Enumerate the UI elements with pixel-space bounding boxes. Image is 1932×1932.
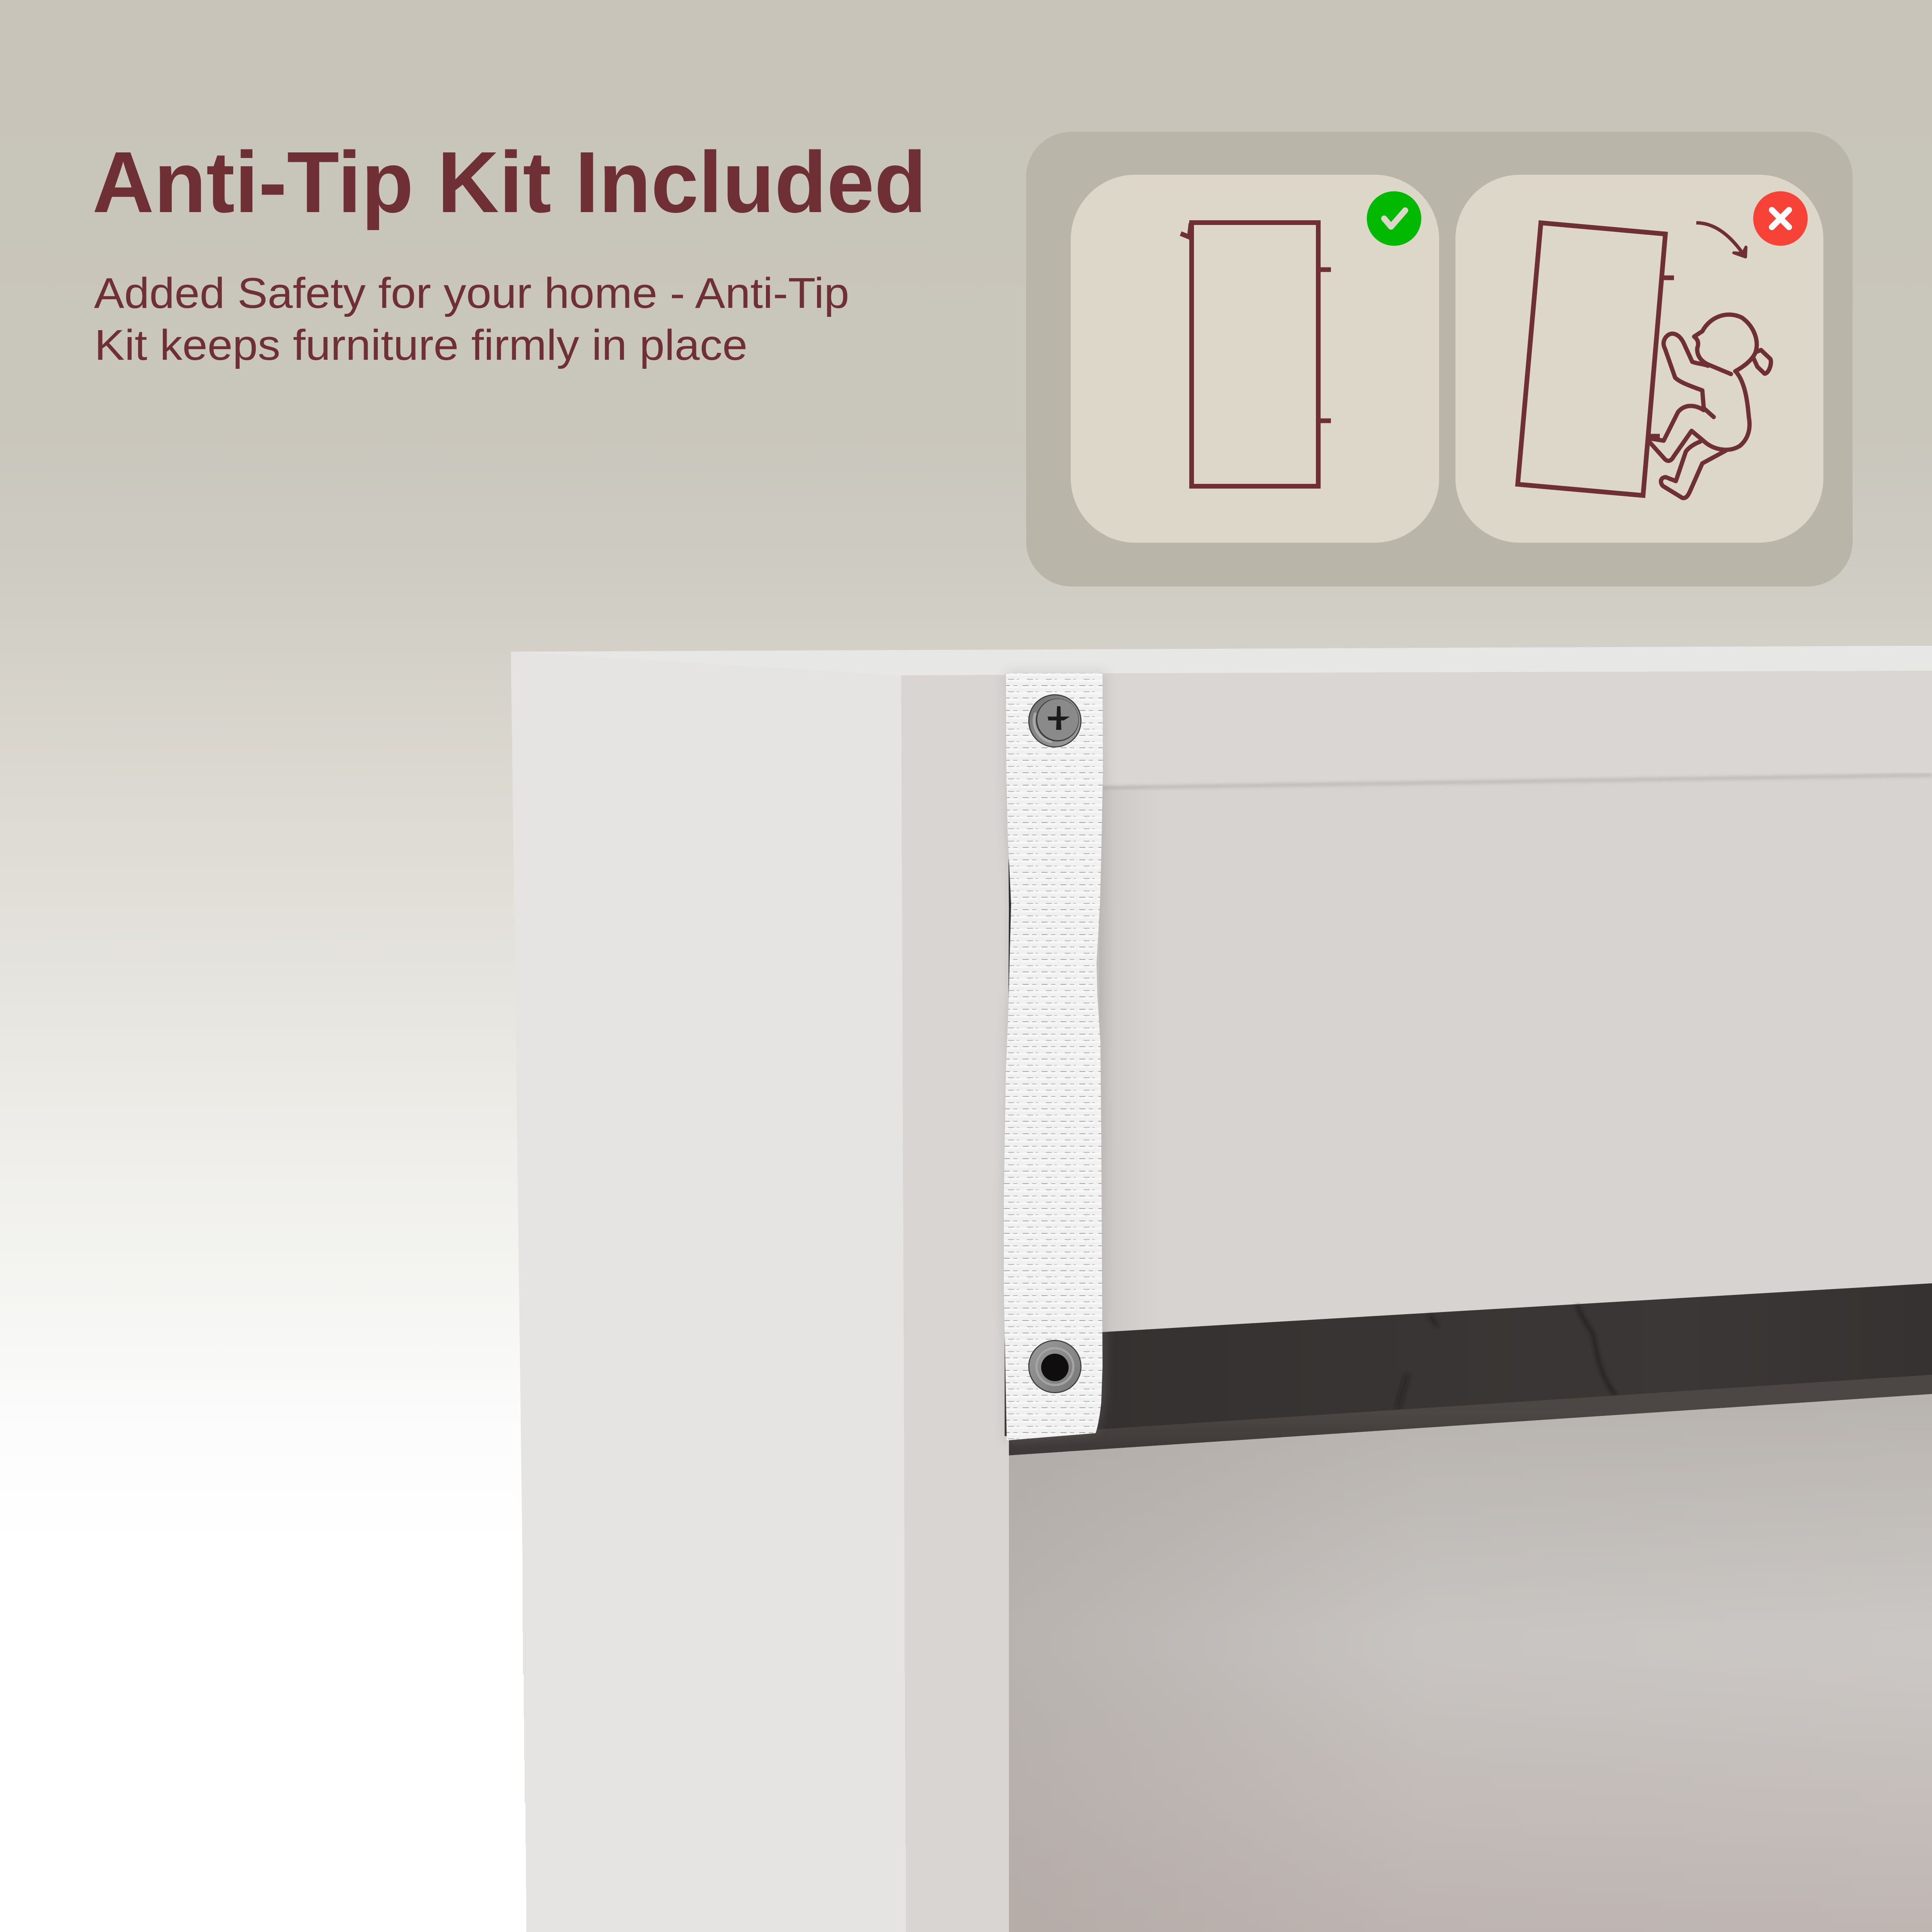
title: Anti-Tip Kit Included xyxy=(92,134,927,231)
panel: anti-tip comparison xyxy=(1026,132,1853,586)
anti-tip strap xyxy=(1004,673,1106,1440)
cabinet inner side face xyxy=(901,674,1021,1589)
top fascia board xyxy=(1005,671,1932,788)
background gradient xyxy=(0,0,1932,1546)
icon: tilted cabinet xyxy=(1518,223,1674,495)
cabinet inner side face, lower part xyxy=(905,1567,1013,1932)
subtitle: Kit keeps furniture firmly in place xyxy=(94,321,747,369)
icon: green check badge xyxy=(1367,191,1421,246)
strap webbing xyxy=(1004,673,1103,1440)
icon: climbing child xyxy=(1650,315,1771,498)
shelf front lip xyxy=(1009,1375,1932,1455)
arrow: tipping direction xyxy=(1696,223,1746,257)
cabinet outer side panel, lower part xyxy=(522,1567,913,1932)
dark marble shelf xyxy=(1005,1283,1932,1436)
cabinet top bevel xyxy=(511,646,1932,675)
icon: phillips screw xyxy=(1028,694,1081,747)
lower back wall xyxy=(1009,1394,1932,1932)
icon: grommet xyxy=(1028,1340,1081,1393)
icon: upright cabinet xyxy=(1181,222,1331,486)
panel: tipping cabinet xyxy=(1455,175,1823,543)
icon: red cross badge xyxy=(1753,191,1807,246)
cabinet photo xyxy=(511,646,1932,1932)
panel: secured cabinet xyxy=(1071,175,1439,543)
back panel xyxy=(1005,774,1932,1340)
subtitle: Added Safety for your home - Anti-Tip xyxy=(94,269,849,317)
cabinet outer side panel xyxy=(511,652,922,1589)
